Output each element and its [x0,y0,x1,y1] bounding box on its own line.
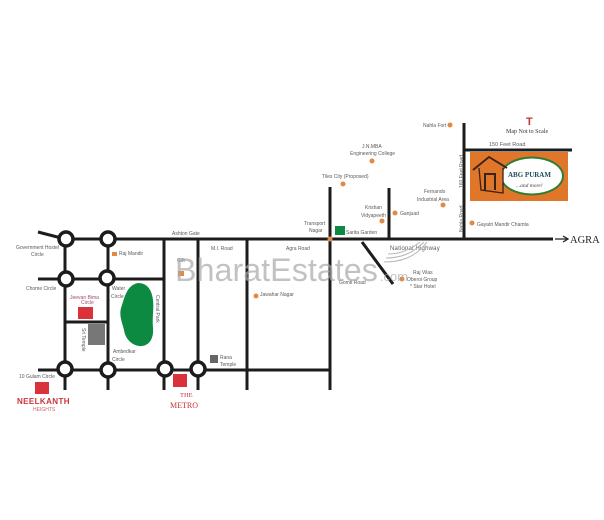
left area labels: Circle [112,357,125,363]
location map [16,116,600,413]
right area labels: Nahla Fort [423,123,447,129]
rotated road labels [80,155,465,352]
agra arrow [555,236,568,242]
left area labels: Jeevan Bima [70,295,99,301]
neelkanth logo text: NEELKANTH [17,397,70,406]
right area labels: Gayatri Mandir Chamta [477,222,529,228]
right area labels: Tiles City (Proposed) [322,174,369,180]
left area labels: Circle [31,252,44,258]
grey marker: rana temple [210,355,218,363]
rotated road labels: Central Park [154,295,160,323]
150 feet road label: 150 Feet Road [489,142,525,148]
neelkanth sub text: HEIGHTS [33,407,56,413]
left area labels: Agra Road [286,246,310,252]
right area labels: Fernando [424,189,446,195]
right area labels [304,123,529,290]
left area labels: Ashton Gate [172,231,200,237]
north marker: T [526,116,533,128]
left area labels: 10 Gulam Circle [19,374,55,380]
the metro logo text: THE [180,392,193,399]
right area labels: J.N.MBA [362,144,382,150]
left area labels: Circle [111,294,124,300]
right area labels: Ganjuad [400,211,419,217]
left area labels: Raj Mandir [119,251,144,257]
left area labels: Jawahar Nagar [260,292,294,298]
red logo: neelkanth [35,382,49,394]
right area labels: Gomti Road [339,280,366,286]
left area labels: Government Hostel [16,245,59,251]
left area labels: Ambedkar [113,349,136,355]
project logo: abg puram: ABG PURAM [508,171,551,179]
right area labels: Transport [304,221,326,227]
left area labels: M.I. Road [211,246,233,252]
landmark markers [112,122,474,298]
central park green area [120,283,153,346]
project logo: abg puram [470,152,568,201]
right area labels: Vidyapeeth [361,213,386,219]
left area labels: Water [112,286,125,292]
road network [38,123,572,390]
left area labels: Temple [220,362,236,368]
right area labels: Krishan [365,205,382,211]
roundabouts [58,232,205,377]
left area labels [16,231,310,380]
right area labels: National Highway [390,246,440,252]
left area labels: Circle [81,300,94,306]
sarita garden green marker [335,226,345,235]
left area labels: Rana [220,355,232,361]
grey block: shopping [88,324,105,345]
project logo: abg puram: ...and more! [516,183,543,189]
red logo: the metro [173,374,187,387]
map not to scale note: Map Not to Scale [506,129,548,135]
rotated road labels: Nahla Road [459,205,465,232]
rotated road labels: 160 Feet Road [459,155,465,188]
right area labels: * Star Hotel [410,284,436,290]
left area labels: Chome Circle [26,286,57,292]
agra label: AGRA [570,235,600,246]
right area labels: Industrial Area [417,197,449,203]
left area labels: Gift [177,258,185,264]
right area labels: Oberoi Group [407,277,438,283]
rotated road labels: Sri Temple [80,328,86,352]
right area labels: Raj Vilas [413,270,433,276]
right area labels: Sarita Garden [346,230,377,236]
right area labels: Nagar [309,228,323,234]
red logo: jeevan [78,307,93,319]
right area labels: Engineering College [350,151,395,157]
the metro logo text 2: METRO [170,401,198,410]
highway wave icon [384,242,427,262]
watermark: BharatEstates.com [175,252,408,288]
